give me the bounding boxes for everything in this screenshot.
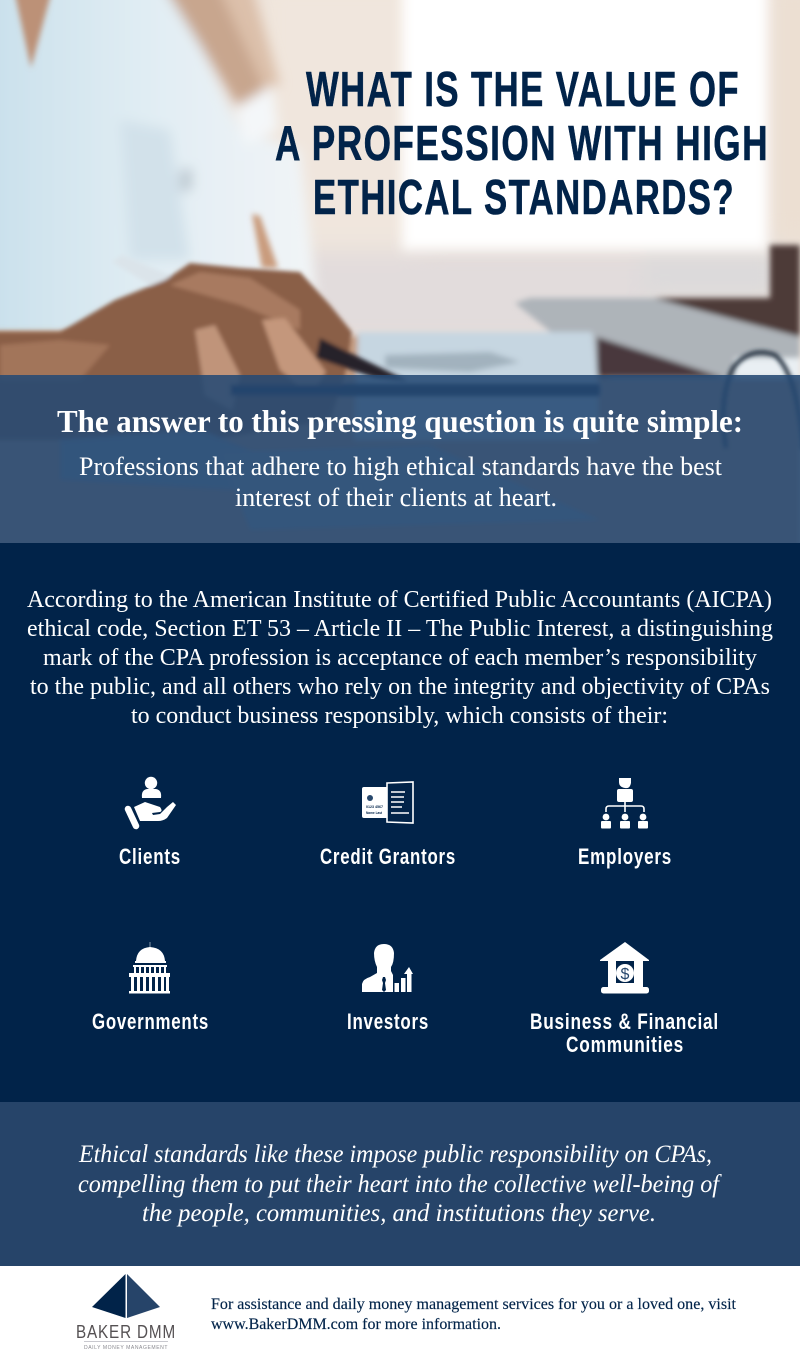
label: business and financial communities: Business & Financial (530, 1009, 719, 1034)
AICPA paragraph: According to the American Institute of Certified Public Accountants (AICPA) (27, 587, 772, 613)
answer body (79, 452, 723, 512)
translucent answer band (0, 375, 800, 543)
icon: government capitol (129, 942, 170, 994)
label: employers: Employers (578, 844, 672, 869)
AICPA paragraph (27, 587, 773, 729)
icon: credit card and receipt: Name Last (366, 811, 383, 815)
label: clients: Clients (119, 844, 181, 869)
closing italic text: compelling them to put their heart into the collective well-being of (78, 1171, 722, 1198)
answer body: interest of their clients at heart. (235, 483, 557, 512)
answer body: Professions that adhere to high ethical standards have the best (79, 452, 723, 481)
label: investors: Investors (347, 1009, 429, 1034)
answer heading: The answer to this pressing question is quite simple: (57, 403, 743, 439)
label: business and financial communities (530, 1009, 719, 1057)
hand and pen (0, 260, 800, 448)
closing italic text (78, 1141, 722, 1227)
blurred background tones (320, 254, 769, 330)
closing italic text: Ethical standards like these impose public responsibility on CPAs, (78, 1141, 712, 1168)
label: business and financial communities: Communities (566, 1032, 684, 1057)
icon: bank with dollar sign: $ (621, 966, 630, 983)
icon: credit card and receipt (362, 782, 413, 823)
window glow (402, 0, 768, 250)
icon: investor with growth chart (362, 944, 413, 992)
panel: footer (0, 1266, 800, 1360)
logo: Baker DMM: BAKER DMM (76, 1322, 176, 1342)
AICPA paragraph: to the public, and all others who rely on the integrity and objectivity of CPAs (30, 674, 770, 700)
footer contact text: www.BakerDMM.com for more information. (211, 1316, 501, 1333)
icon: bank with dollar sign (600, 942, 649, 994)
header photo: hand writing on a clipboard (0, 0, 800, 560)
title (275, 63, 769, 225)
logo: Baker DMM: DAILY MONEY MANAGEMENT (84, 1345, 168, 1351)
footer contact text: For assistance and daily money management services for you or a loved one, visit (211, 1296, 737, 1313)
icon: employers org chart (601, 778, 648, 828)
closing italic text: the people, communities, and institutions they serve. (142, 1200, 656, 1227)
icon: clients (128, 777, 176, 826)
panel: closing statement (0, 1102, 800, 1266)
panel: AICPA stakeholders (0, 543, 800, 1102)
answer text block (57, 403, 743, 512)
label: governments: Governments (92, 1009, 209, 1034)
logo: Baker DMM (76, 1274, 176, 1351)
shirt and neck (0, 0, 322, 345)
AICPA paragraph: to conduct business responsibly, which consists of their: (131, 703, 668, 729)
label: credit grantors: Credit Grantors (320, 844, 456, 869)
AICPA paragraph: mark of the CPA profession is acceptance of each member’s responsibility (43, 645, 757, 671)
AICPA paragraph: ethical code, Section ET 53 – Article II – The Public Interest, a distinguishing (27, 616, 773, 642)
footer contact text (211, 1296, 737, 1333)
icon: credit card and receipt: 0123 4567 (366, 805, 383, 809)
